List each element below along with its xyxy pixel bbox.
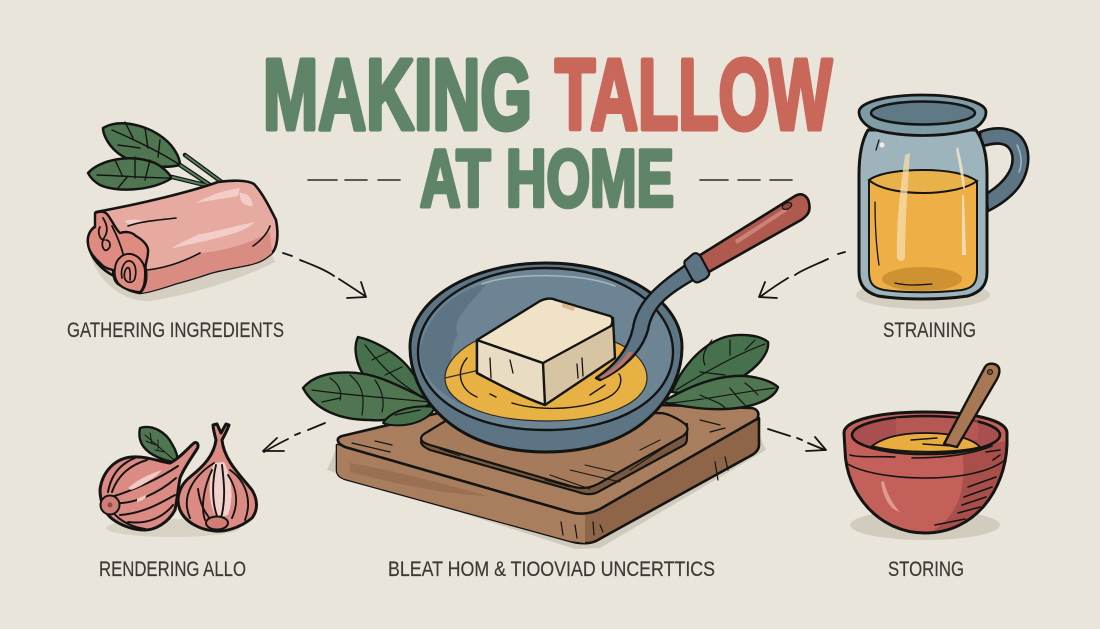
arrow: pan to storing [768, 429, 826, 451]
wooden spoon [944, 364, 999, 447]
butter block [477, 299, 615, 405]
icon: shallots [100, 424, 256, 537]
label: bleat hom and tiooviad uncerttics: BLEAT HOM & TIOOVIAD UNCERTTICS [388, 558, 715, 581]
frying pan [410, 194, 810, 452]
label: storing: STORING [888, 558, 964, 581]
left shallot [100, 443, 198, 530]
icon: bowl with spoon [844, 364, 1010, 540]
jar liquid [869, 170, 977, 292]
meat cut end [88, 212, 148, 293]
right shallot [178, 424, 256, 531]
infographic canvas [68, 56, 1030, 576]
bowl rim [852, 416, 1000, 454]
icon: pork fat with leaves [88, 122, 277, 301]
inner board [421, 413, 687, 494]
pan handle [596, 194, 810, 380]
cutting board [337, 405, 759, 543]
title: AT HOME [420, 134, 674, 224]
jar handle [980, 128, 1028, 211]
central pan on cutting board [303, 194, 810, 549]
left leaves [303, 337, 435, 425]
icon: herb leaves [88, 122, 223, 190]
jar rim [859, 95, 986, 136]
icon: glass jar of tallow [856, 95, 1028, 309]
bowl body [844, 412, 1007, 533]
melted fat [445, 340, 647, 421]
arrow: pan to rendering [263, 423, 325, 452]
title: MAKING [263, 39, 532, 151]
arrow: ingredients to pan [283, 253, 366, 298]
title: TALLOW [555, 39, 832, 151]
label: gathering ingredients: GATHERING INGREDIENTS [67, 319, 284, 342]
right leaves [662, 335, 778, 409]
shallot leaf [139, 427, 178, 463]
arrow: straining to pan [759, 252, 845, 298]
label: straining: STRAINING [883, 319, 976, 342]
title [263, 39, 832, 224]
bowl contents [872, 433, 980, 452]
label: rendering allo: RENDERING ALLO [99, 558, 246, 581]
